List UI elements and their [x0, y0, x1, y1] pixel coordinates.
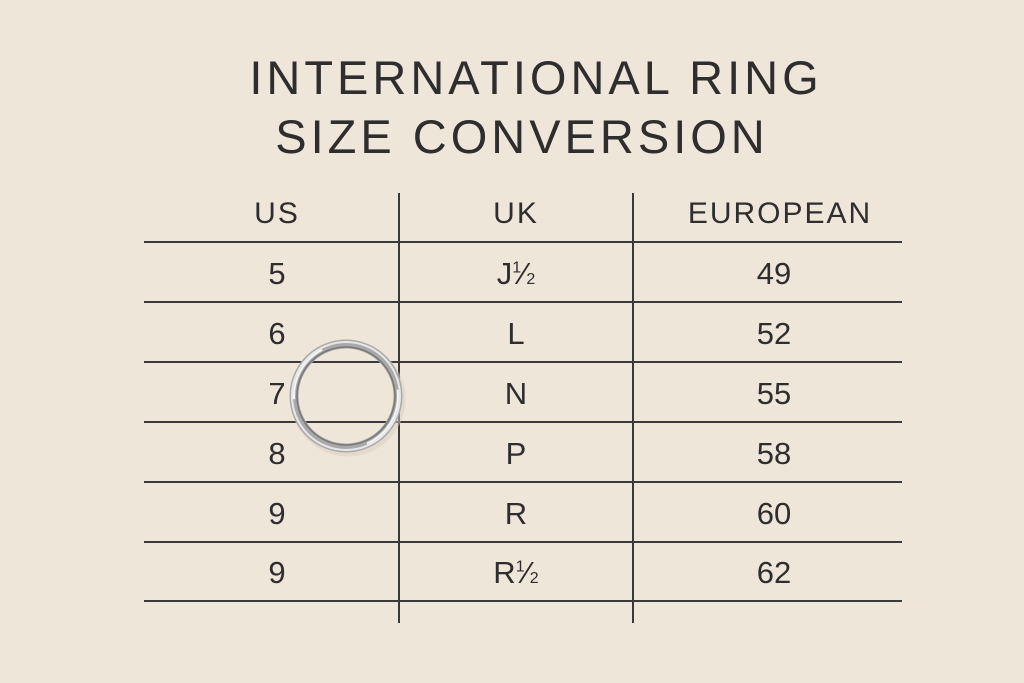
text: 9	[268, 555, 286, 590]
text: J1⁄2	[497, 256, 535, 291]
header: US: US	[254, 197, 300, 230]
text: 52	[757, 316, 791, 351]
text: 8	[268, 436, 286, 471]
icon: ring	[290, 340, 406, 456]
text: 7	[268, 376, 286, 411]
text: 55	[757, 376, 791, 411]
header: UK: UK	[493, 197, 539, 230]
text: 62	[757, 555, 791, 590]
text: 5	[268, 256, 286, 291]
text: N	[505, 376, 527, 411]
header: European: EUROPEAN	[688, 197, 872, 230]
title: INTERNATIONAL RING	[249, 51, 823, 104]
rows	[268, 256, 791, 590]
text: 58	[757, 436, 791, 471]
text: L	[507, 316, 525, 351]
text: R1⁄2	[493, 555, 539, 590]
text: R	[505, 496, 527, 531]
title: SIZE CONVERSION	[275, 110, 769, 163]
text: 6	[268, 316, 286, 351]
title	[249, 51, 823, 163]
text: 60	[757, 496, 791, 531]
text: P	[506, 436, 526, 471]
text: 49	[757, 256, 791, 291]
text: 9	[268, 496, 286, 531]
